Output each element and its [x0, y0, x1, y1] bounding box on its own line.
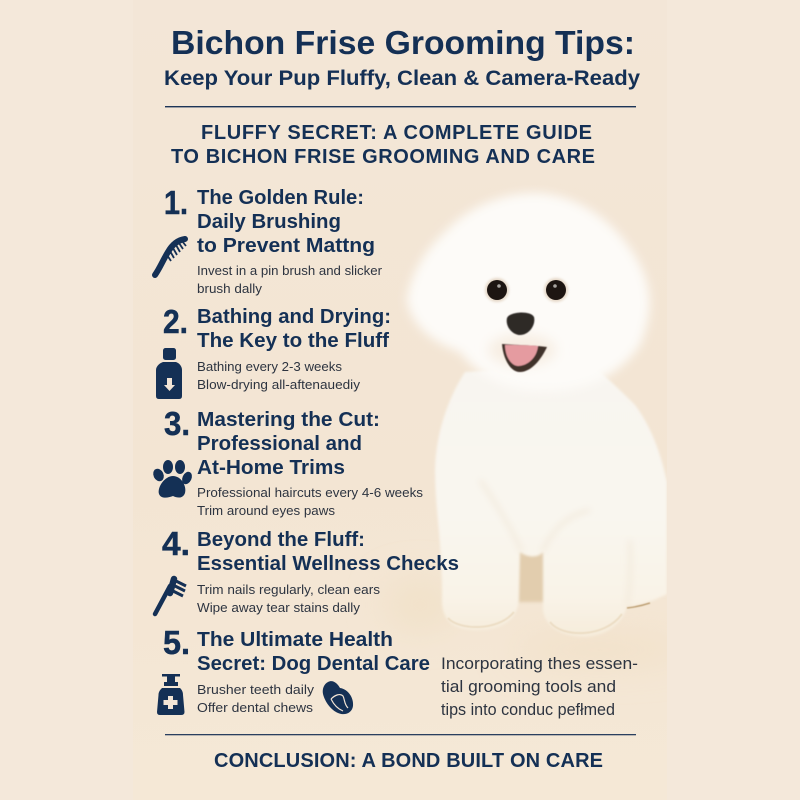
number 2: 2. [163, 303, 188, 340]
eye right [544, 278, 568, 302]
heading 2 [197, 305, 391, 352]
heading 3: At-Home Trims [197, 456, 345, 479]
closing paragraph [441, 654, 638, 719]
mouth and tongue [502, 344, 547, 372]
body text 4: Trim nails regularly, clean ears [197, 582, 381, 597]
closing paragraph: tips into conduc pefłmed [441, 700, 615, 719]
number 4: 4. [162, 525, 190, 562]
icon: pump bottle [157, 674, 184, 715]
body text 3 [197, 485, 424, 518]
heading 2: The Key to the Fluff [197, 329, 389, 352]
heading 1: The Golden Rule: [197, 186, 364, 209]
section 3: mastering the cut [151, 405, 424, 518]
nose [507, 313, 534, 335]
fur shading [574, 512, 582, 516]
gap between legs [518, 552, 544, 604]
section 4: wellness checks [155, 525, 459, 615]
heading 5: Secret: Dog Dental Care [197, 652, 430, 675]
closing paragraph: tial grooming tools and [441, 677, 616, 696]
eye left [485, 278, 509, 302]
guide heading [171, 122, 595, 168]
body text 4: Wipe away tear stains dally [197, 600, 361, 615]
body text 2: Blow-drying all-aftenauediy [197, 377, 361, 392]
body text 1 [197, 263, 383, 296]
guide heading: FLUFFY SECRET: A COMPLETE GUIDE [201, 122, 592, 144]
paw detail [448, 603, 650, 633]
guide heading: TO BICHON FRISE GROOMING AND CARE [171, 146, 595, 168]
heading 1: Daily Brushing [197, 210, 341, 233]
body text 3: Professional haircuts every 4-6 weeks [197, 485, 424, 500]
conclusion heading: CONCLUSION: A BOND BUILT ON CARE [214, 750, 603, 772]
heading 5 [197, 628, 430, 675]
head fluff [407, 193, 649, 391]
body text 1: Invest in a pin brush and slicker [197, 263, 383, 278]
body text 2: Bathing every 2-3 weeks [197, 359, 343, 374]
body text 4 [197, 582, 381, 615]
heading 1: to Prevent Mattng [197, 234, 375, 257]
section 5: dental care [157, 624, 430, 715]
icon: dental chew [323, 681, 353, 714]
body text 5 [197, 682, 315, 715]
heading 2: Bathing and Drying: [197, 305, 391, 328]
body text 3: Trim around eyes paws [197, 503, 335, 518]
icon: shampoo bottle [156, 348, 182, 399]
poster panel [133, 0, 667, 800]
photo: bichon frise dog [404, 190, 667, 634]
body text 5: Offer dental chews [197, 700, 314, 715]
heading 4: Beyond the Fluff: [197, 528, 365, 551]
heading 3: Professional and [197, 432, 362, 455]
heading 3: Mastering the Cut: [197, 408, 380, 431]
muzzle shading [488, 334, 556, 366]
section 1: daily brushing [155, 184, 383, 296]
heading 3 [197, 408, 380, 479]
icon: nail brush [155, 579, 186, 614]
heading 1 [197, 186, 375, 257]
icon: comb [155, 239, 186, 275]
subtitle: Keep Your Pup Fluffy, Clean & Camera-Ready [164, 67, 640, 90]
heading 5: The Ultimate Health [197, 628, 393, 651]
body text 2 [197, 359, 361, 392]
soft backdrop shadow [404, 594, 436, 618]
section 2: bathing and drying [156, 303, 391, 399]
icon: paw print [151, 460, 194, 498]
dog body [435, 365, 667, 637]
body text 1: brush dally [197, 281, 263, 296]
closing paragraph: Incorporating thes essen- [441, 654, 638, 673]
heading 4: Essential Wellness Checks [197, 552, 459, 575]
heading 4 [197, 528, 459, 575]
number 3: 3. [164, 405, 190, 442]
title: Bichon Frise Grooming Tips: [171, 24, 635, 61]
number 5: 5. [163, 624, 190, 661]
number 1: 1. [164, 184, 188, 221]
body text 5: Brusher teeth daily [197, 682, 315, 697]
